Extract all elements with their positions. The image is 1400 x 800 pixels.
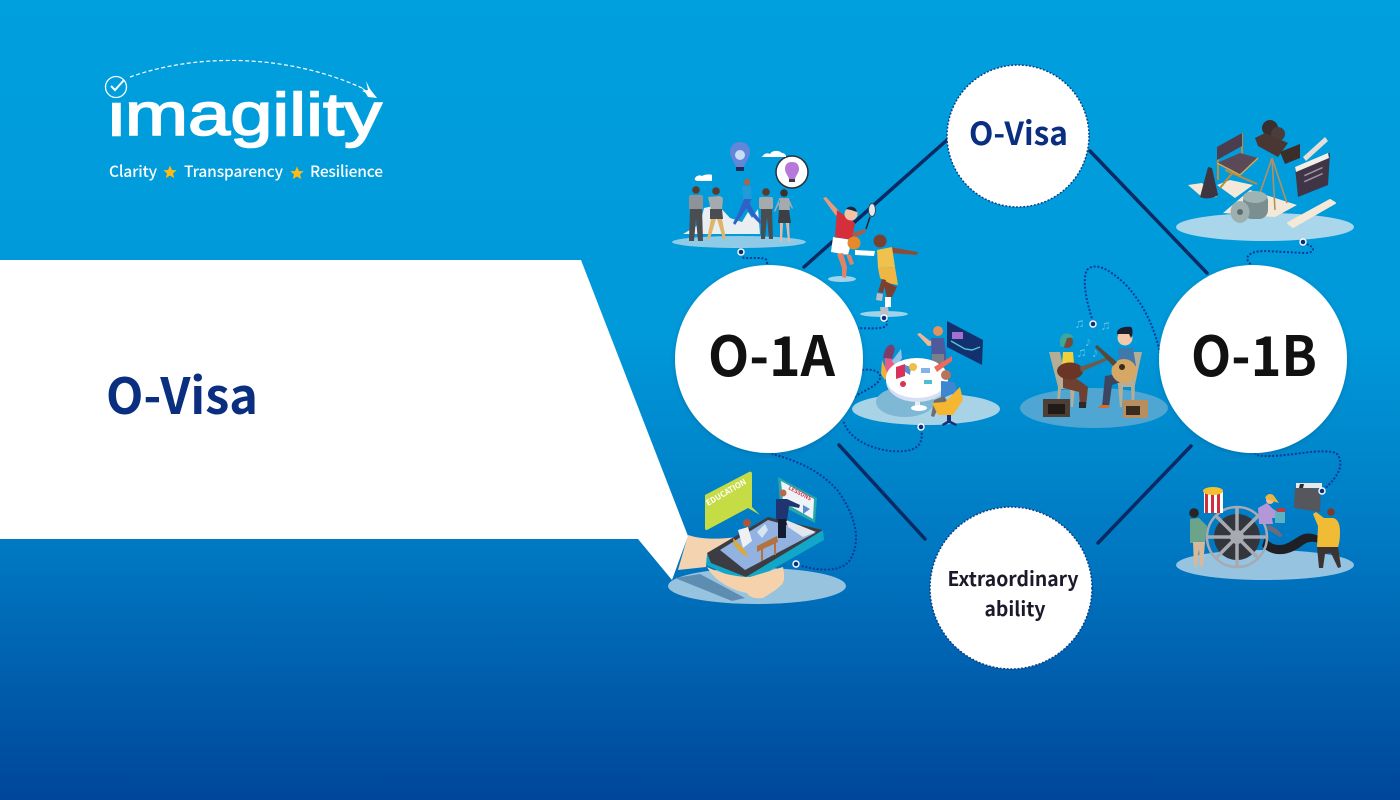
film strip [1262, 533, 1330, 554]
man in yellow with clapperboard [1313, 508, 1341, 568]
hand fingers [707, 567, 784, 598]
woman on reel with drink [1258, 494, 1285, 537]
data screen [947, 321, 983, 365]
circle: extraordinary ability: Extraordinary [948, 563, 1079, 592]
music notes: ♪ [1091, 348, 1099, 359]
logo dashed arc [130, 60, 362, 88]
film cans [1230, 191, 1268, 223]
circle: O-1A: O-1A [708, 312, 836, 392]
chair right [1117, 352, 1142, 407]
tennis player [823, 197, 876, 278]
table shadow [876, 387, 934, 417]
clapperboard [1295, 137, 1330, 197]
illustration: film set props [1176, 120, 1354, 241]
ground ellipse [1176, 550, 1354, 580]
illustration: cinema film reel and audience [1176, 483, 1354, 580]
person 2 [707, 187, 726, 239]
person 3 [759, 188, 773, 239]
circle: O-1B: O-1B [1191, 312, 1317, 392]
circle: extraordinary ability: ability [984, 593, 1046, 622]
music notes: ♫ [1102, 321, 1110, 332]
illustration: education on phone [668, 472, 846, 604]
basketball player [855, 234, 918, 315]
ground ellipse [668, 568, 846, 604]
music notes [1076, 319, 1110, 359]
dotted trails [741, 243, 1340, 570]
lessons screen: LESSONS [787, 484, 813, 503]
tagline: resilience: Resilience [310, 160, 383, 182]
circle: O-Visa: O-Visa [969, 109, 1068, 155]
director chair [1217, 133, 1258, 188]
ground ellipse [672, 236, 806, 248]
purple idea bubble [776, 156, 808, 188]
connector lines [804, 140, 1207, 543]
illustration: musicians with guitars [1020, 319, 1168, 428]
person 1 [689, 186, 703, 241]
main heading: O-Visa [106, 357, 258, 429]
man with guitar [1095, 327, 1136, 408]
education speech bubble: EDUCATION [704, 477, 748, 509]
person with popcorn [1189, 487, 1223, 567]
round table [886, 356, 952, 411]
phone [706, 517, 824, 584]
music notes: ♫ [1078, 348, 1086, 359]
movie camera [1255, 120, 1300, 210]
logo check icon [104, 75, 128, 99]
chair left [1049, 352, 1078, 407]
student at desk [733, 519, 778, 561]
white title banner [0, 260, 688, 580]
tagline: transparency: Transparency [184, 160, 284, 182]
tagline: clarity: Clarity [109, 160, 158, 182]
phone shadow [675, 574, 745, 601]
music notes: ♪ [1084, 337, 1092, 348]
logo paper plane [361, 81, 377, 98]
ground ellipse [1176, 213, 1354, 241]
logo wordmark: imagility [108, 81, 382, 148]
shadow: basketball player [860, 311, 908, 317]
circle: O-1A [675, 265, 863, 453]
amp right [1123, 400, 1148, 418]
white strip [1288, 200, 1335, 227]
illustration: athletes [823, 197, 918, 317]
lessons screen [778, 477, 817, 523]
jumping person [733, 179, 762, 225]
presenter [917, 326, 946, 367]
woman with guitar [1057, 333, 1108, 408]
illustration: meeting around table [852, 321, 1000, 426]
circle: extraordinary ability [930, 507, 1092, 669]
star [163, 166, 177, 178]
hand palm [678, 535, 737, 570]
megaphone [1200, 167, 1218, 198]
floor tiles [1188, 180, 1297, 217]
handheld clapperboard [1294, 483, 1322, 512]
circle: O-1B [1159, 265, 1347, 453]
teacher [776, 490, 800, 538]
logo [104, 60, 383, 182]
mountain [683, 205, 760, 234]
shadow: tennis player [828, 276, 856, 282]
seated woman [881, 345, 902, 380]
trail marker dots [738, 239, 1325, 567]
amp left [1043, 399, 1070, 417]
music notes: ♫ [1076, 319, 1084, 330]
ground ellipse [1020, 388, 1168, 428]
ground ellipse [852, 393, 1000, 425]
clouds [695, 151, 786, 181]
man in yellow chair [931, 370, 963, 426]
education speech bubble [704, 472, 760, 530]
person 4 [774, 189, 793, 242]
star [290, 166, 304, 179]
circle: O-Visa [947, 65, 1089, 207]
blue idea bulb [730, 142, 750, 171]
illustration: team with idea bulbs [672, 142, 808, 248]
film reel [1207, 507, 1267, 567]
